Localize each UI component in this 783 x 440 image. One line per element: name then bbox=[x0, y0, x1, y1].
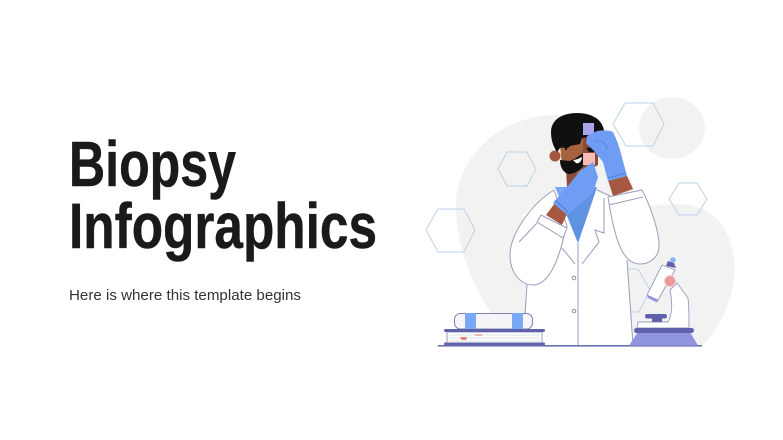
ground line bbox=[438, 345, 702, 347]
left forearm bbox=[546, 203, 567, 225]
buttons bbox=[572, 276, 576, 313]
left sleeve bbox=[510, 190, 567, 285]
left glove bbox=[553, 162, 598, 215]
neck bbox=[566, 165, 590, 188]
background blobs bbox=[456, 97, 735, 345]
smile bbox=[573, 157, 582, 163]
title bbox=[69, 128, 377, 262]
title: Biopsy bbox=[69, 128, 236, 200]
microscope bbox=[629, 257, 698, 346]
title: Infographics bbox=[69, 190, 377, 262]
right sleeve bbox=[608, 190, 659, 264]
face bbox=[560, 135, 598, 175]
beard bbox=[560, 153, 584, 174]
illustration: scientist bbox=[426, 97, 735, 347]
books bbox=[444, 313, 545, 346]
ear bbox=[550, 150, 560, 162]
glass slide bbox=[583, 123, 594, 135]
shirt bbox=[555, 187, 597, 243]
coat body bbox=[523, 188, 640, 345]
right forearm bbox=[608, 176, 633, 196]
right glove bbox=[586, 130, 627, 181]
subtitle: Here is where this template begins bbox=[69, 287, 301, 304]
coat lines bbox=[525, 190, 633, 345]
hair bbox=[551, 113, 604, 152]
hexagons bbox=[426, 103, 707, 312]
eyes bbox=[563, 146, 570, 148]
